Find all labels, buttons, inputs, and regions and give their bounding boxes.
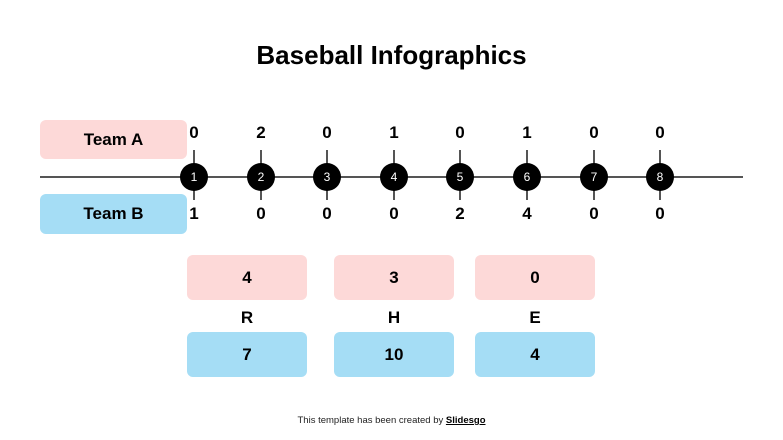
innings timeline: 0 [322, 204, 332, 223]
totals: R H E: 4 [242, 268, 252, 286]
innings timeline: 0 [589, 123, 599, 142]
footer: This template has been created by Slidesgo [298, 415, 486, 426]
innings timeline: 2 [256, 123, 266, 142]
innings timeline: 8 [657, 170, 663, 184]
totals: R H E: 0 [530, 268, 540, 286]
innings timeline: 2 [455, 204, 465, 223]
innings timeline: 0 [455, 123, 465, 142]
innings timeline: 4 [522, 204, 532, 223]
totals: R H E: H [388, 308, 400, 327]
innings timeline: 1 [191, 170, 197, 184]
innings timeline: 0 [322, 123, 332, 142]
timeline line [40, 176, 743, 178]
innings timeline: 4 [391, 170, 397, 184]
innings timeline: 6 [524, 170, 530, 184]
innings timeline: 0 [389, 204, 399, 223]
innings timeline: 0 [189, 123, 199, 142]
label: Team A [40, 120, 187, 159]
innings timeline: 0 [655, 204, 665, 223]
totals: R H E: 10 [385, 344, 403, 364]
innings timeline [180, 123, 674, 223]
innings timeline: 2 [258, 170, 264, 184]
totals: R H E: 3 [389, 268, 399, 286]
innings timeline: 0 [655, 123, 665, 142]
innings timeline: 7 [591, 170, 597, 184]
innings timeline: 0 [589, 204, 599, 223]
innings timeline: 1 [389, 123, 399, 142]
innings timeline: 5 [457, 170, 463, 184]
innings timeline: 3 [324, 170, 330, 184]
innings timeline: 1 [522, 123, 532, 142]
totals: R H E: E [529, 308, 541, 327]
totals: R H E: R [241, 308, 253, 327]
label: Team B [40, 194, 187, 234]
label: Team B: Team B [83, 204, 144, 223]
totals: R H E: 7 [242, 344, 252, 364]
totals: R H E [187, 255, 595, 377]
totals: R H E: 4 [530, 344, 540, 364]
title: Baseball Infographics [256, 40, 527, 70]
label: Team A: Team A [84, 130, 143, 148]
innings timeline: 1 [189, 204, 199, 223]
innings timeline: 0 [256, 204, 266, 223]
